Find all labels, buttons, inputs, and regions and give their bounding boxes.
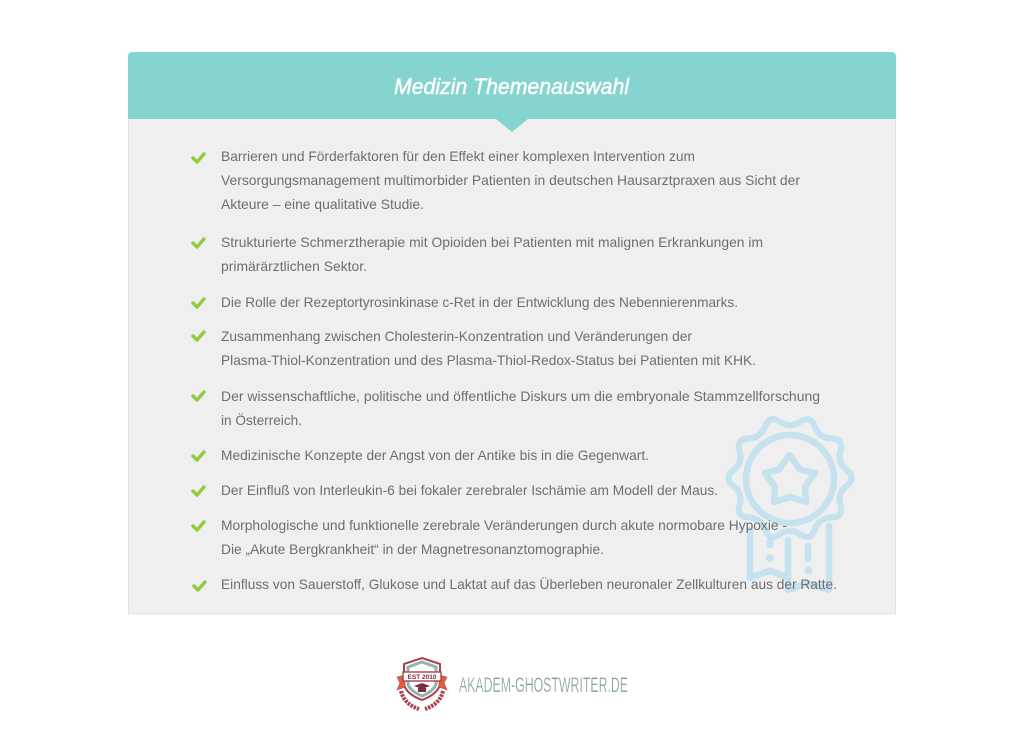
icon: check <box>193 452 204 460</box>
icon: award badge watermark <box>728 419 852 590</box>
logo text: AKADEM-GHOSTWRITER.DE <box>459 673 628 697</box>
header pointer <box>496 119 528 132</box>
icon: shield crest: EST 2010 <box>408 675 437 681</box>
list item 8 <box>193 517 787 557</box>
list item 8: Morphologische und funktionelle zerebrale Veränderungen durch akute normobare Hypoxie - <box>221 517 787 533</box>
title: Medizin Themenauswahl <box>394 74 630 99</box>
list item 2 <box>193 234 763 274</box>
icon: check <box>193 299 204 307</box>
icon: shield crest <box>397 658 447 709</box>
list item 3: Die Rolle der Rezeptortyrosinkinase c-Ret in der Entwicklung des Nebennierenmarks. <box>221 294 738 310</box>
list item 5: Der wissenschaftliche, politische und öffentliche Diskurs um die embryonale Stammzellforschung <box>221 388 820 404</box>
icon: check <box>193 392 204 400</box>
icon: check <box>193 487 204 495</box>
list item 7: Der Einfluß von Interleukin-6 bei fokaler zerebraler Ischämie am Modell der Maus. <box>221 482 718 498</box>
list item 1: Akteure – eine qualitative Studie. <box>221 196 424 212</box>
icon: check <box>193 154 204 162</box>
panel: topic list card <box>128 52 896 614</box>
list item 4: Zusammenhang zwischen Cholesterin-Konzentration und Veränderungen der <box>221 328 692 344</box>
list item 6: Medizinische Konzepte der Angst von der Antike bis in die Gegenwart. <box>221 447 649 463</box>
list item 4: Plasma-Thiol-Konzentration und des Plasma-Thiol-Redox-Status bei Patienten mit KHK. <box>221 352 756 368</box>
list item 1 <box>193 148 800 212</box>
list item 1: Versorgungsmanagement multimorbider Patienten in deutschen Hausarztpraxen aus Sicht der <box>221 172 800 188</box>
list item 2: Strukturierte Schmerztherapie mit Opioiden bei Patienten mit malignen Erkrankungen im <box>221 234 763 250</box>
icon: check <box>193 522 204 530</box>
list item 2: primärärztlichen Sektor. <box>221 258 367 274</box>
icon: check <box>193 239 204 247</box>
list item 9: Einfluss von Sauerstoff, Glukose und Laktat auf das Überleben neuronaler Zellkulturen aus der Ratte. <box>221 575 837 592</box>
list item 1: Barrieren und Förderfaktoren für den Effekt einer komplexen Intervention zum <box>221 148 695 164</box>
list item 5: in Österreich. <box>221 411 302 428</box>
list item 5 <box>193 388 820 428</box>
list item 4 <box>193 328 756 368</box>
icon: check <box>193 332 204 340</box>
logo: akadem-ghostwriter <box>397 658 628 709</box>
list item 8: Die „Akute Bergkrankheit“ in der Magnetresonanztomographie. <box>221 541 604 557</box>
panel header band <box>128 52 896 119</box>
panel body <box>128 110 896 614</box>
icon: check <box>194 582 205 590</box>
